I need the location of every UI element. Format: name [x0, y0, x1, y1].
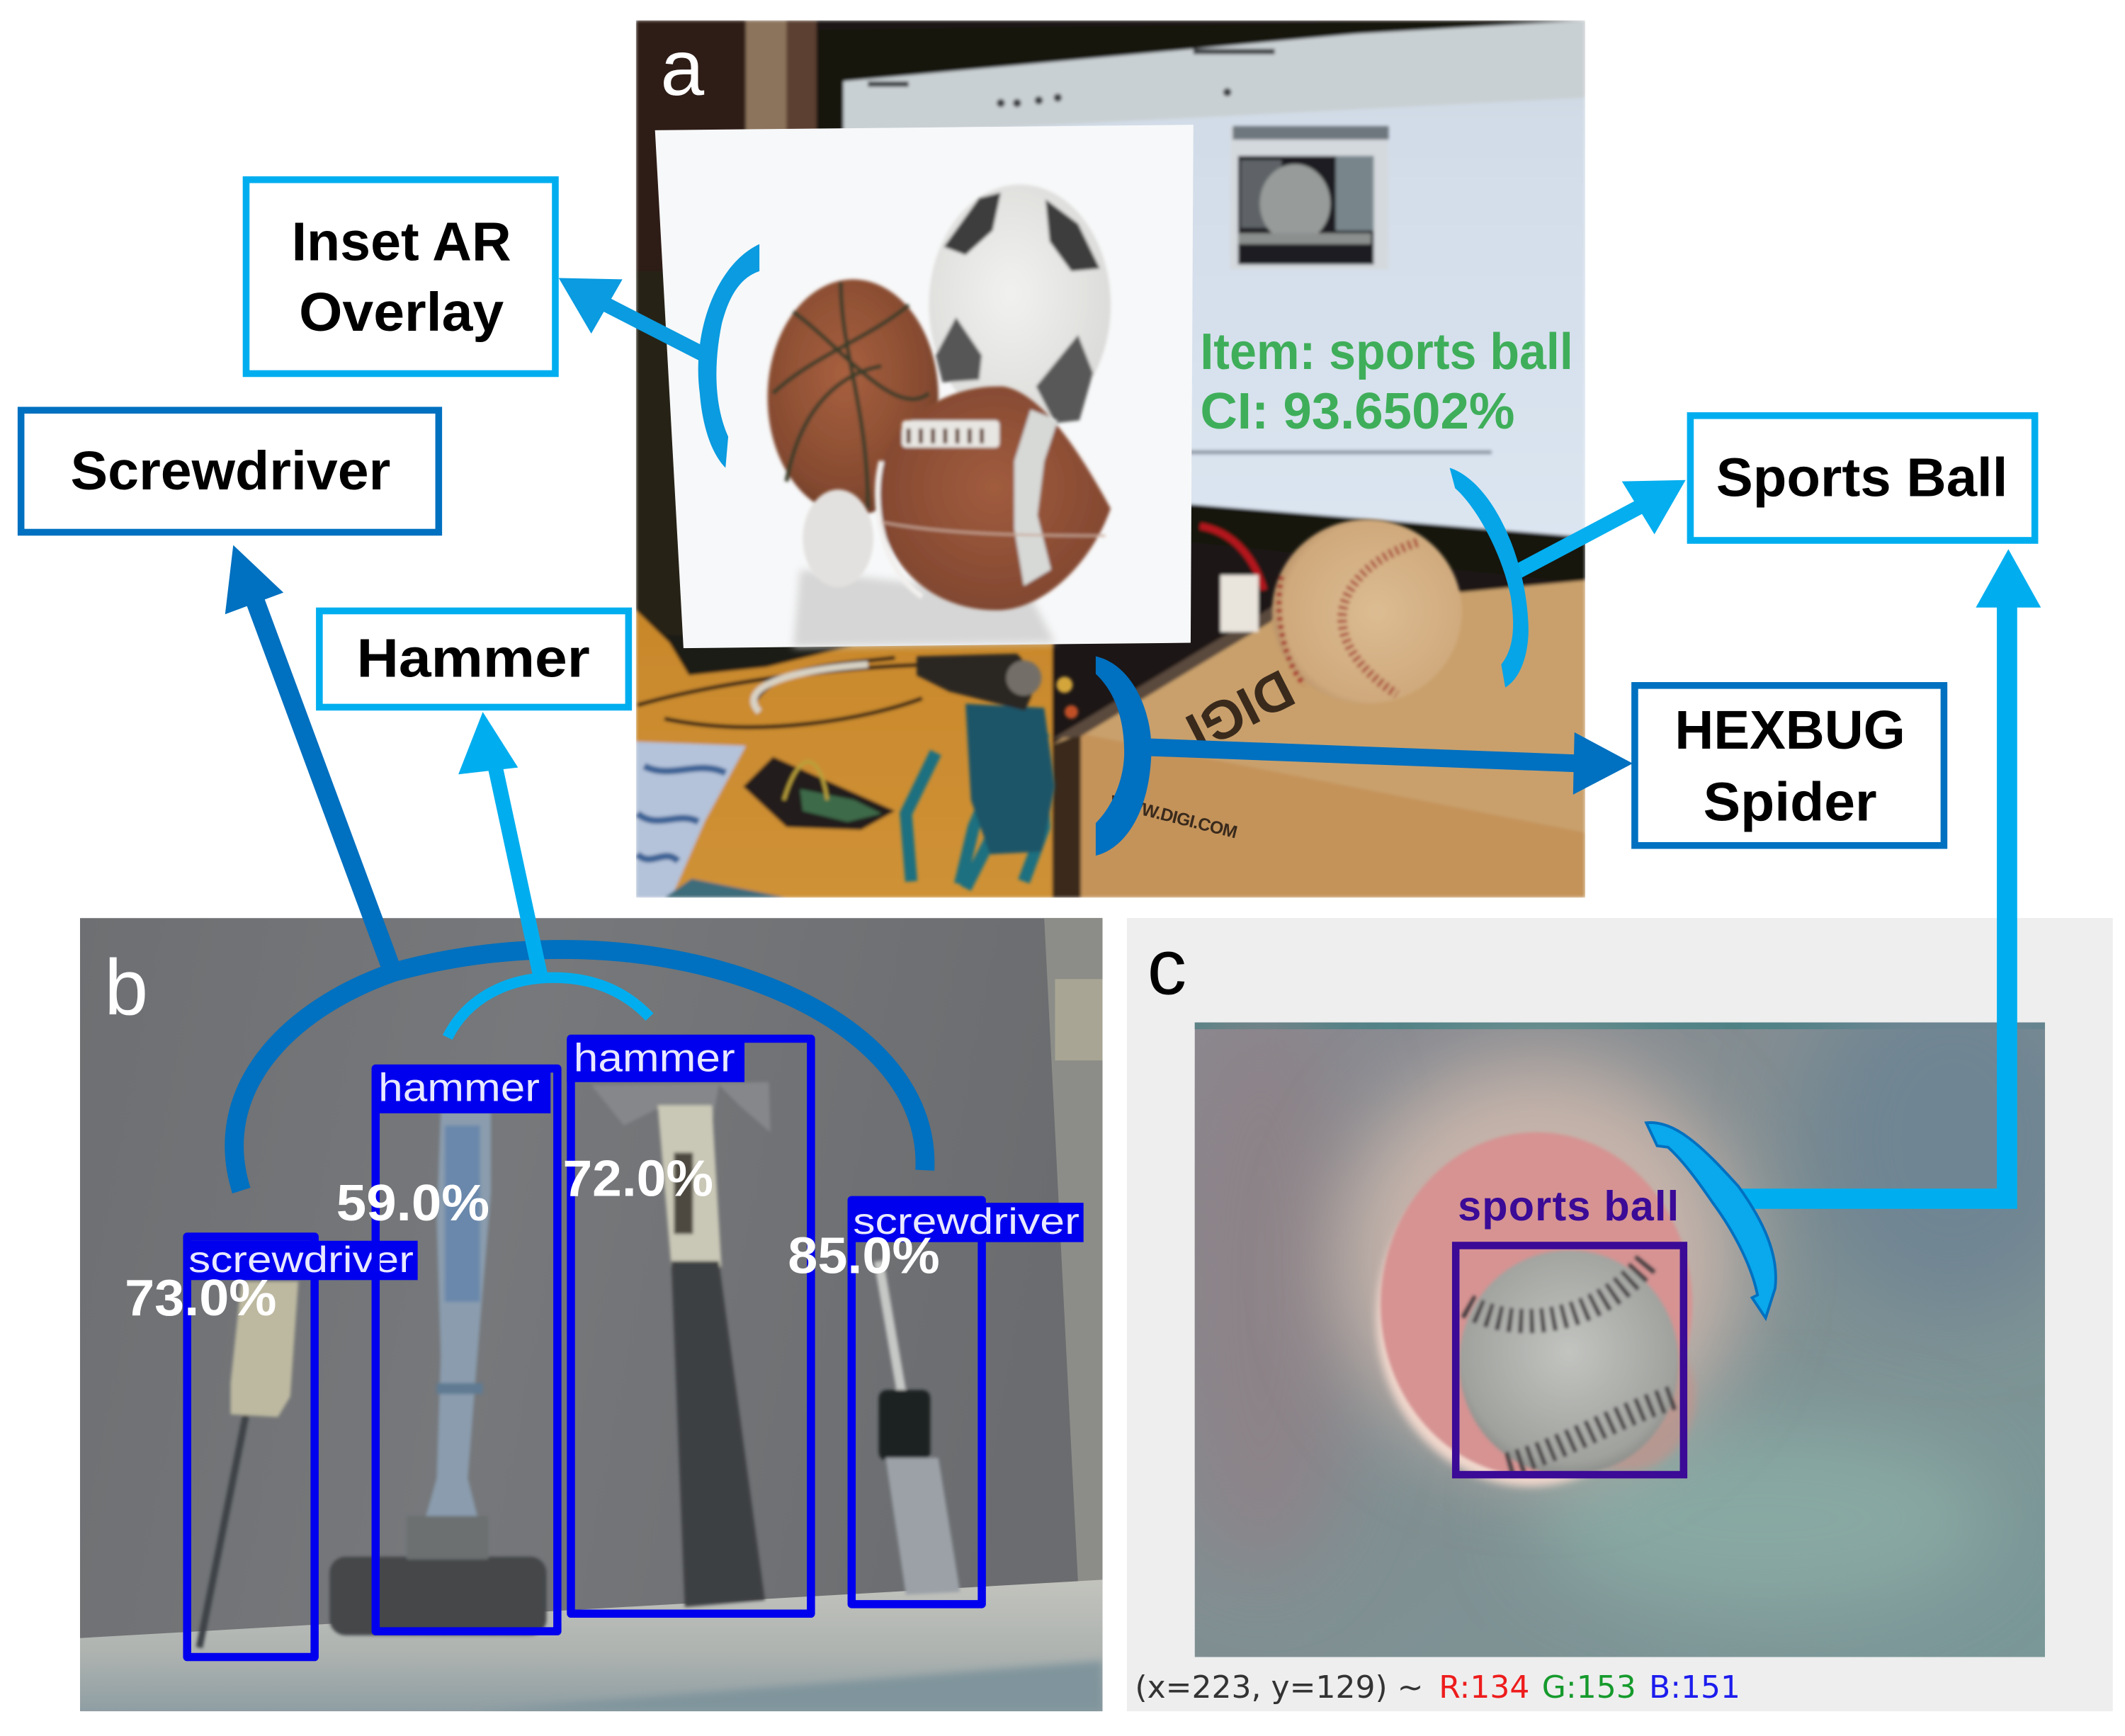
bracket: hexbug [1096, 657, 1151, 856]
claw hammer [591, 1082, 770, 1607]
poster floor shadow [793, 569, 1055, 647]
panel letter c: c [1148, 922, 1186, 1011]
label: Sports Ball [1690, 416, 2035, 540]
detection box: screwdriver 2: screwdriver [853, 1201, 1080, 1242]
panel letter b: b [104, 943, 148, 1031]
label: Screwdriver: Screwdriver [71, 441, 390, 501]
bracket: inset overlay [698, 244, 759, 468]
pixel readout: G:153 [1542, 1669, 1636, 1706]
confidence labels: 72.0% [563, 1150, 713, 1208]
arrow: screwdrivers [225, 545, 925, 1191]
box lettering [1112, 670, 1295, 839]
label: Inset AR Overlay: Inset AR [292, 212, 511, 273]
grey baseball [1459, 1250, 1679, 1475]
confidence labels: 85.0% [788, 1227, 940, 1285]
detection box sports ball: sports ball [1458, 1182, 1679, 1230]
detection box sports ball [1456, 1182, 1684, 1475]
detection box: screwdriver 1 [184, 1237, 418, 1657]
wall and floor [80, 918, 1102, 1711]
inset AR overlay poster [655, 125, 1194, 648]
panel c: sports ball detection window [1127, 918, 2113, 1711]
confidence labels [125, 1150, 940, 1327]
basketball [768, 279, 939, 516]
arc: hammer group [448, 977, 650, 1038]
arrow: sports ball photo [1450, 468, 1686, 688]
hexbug spider robot [906, 654, 1078, 888]
pixel readout: B:151 [1649, 1669, 1740, 1706]
detection box: screwdriver 2 [849, 1200, 1084, 1604]
label: Inset AR Overlay: Overlay [299, 283, 504, 343]
box lettering: WWW.DIGI.COM [1109, 792, 1240, 842]
arrow: hexbug spider [1096, 657, 1633, 856]
pixel readout: R:134 [1439, 1669, 1529, 1706]
photo backdrop: monitor and desk [636, 21, 1585, 897]
bracket: baseball [1450, 468, 1529, 688]
detection box: hammer 2: hammer [574, 1036, 735, 1079]
screen detection text: Item: sports ball [1200, 323, 1573, 380]
detection box: hammer 1: hammer [378, 1066, 540, 1110]
label: Hammer [319, 611, 628, 707]
screen inset thumbnail [1230, 126, 1388, 270]
large baseball [1272, 519, 1462, 704]
small baseball [803, 489, 873, 587]
label: HEXBUG Spider: Spider [1704, 772, 1877, 832]
label: HEXBUG Spider: HEXBUG [1674, 700, 1905, 761]
arrow: hammers [448, 712, 650, 1038]
camera image [1166, 963, 2102, 1657]
arrow: inset AR overlay [559, 244, 759, 468]
label: Inset AR Overlay [246, 180, 555, 373]
detection box: hammer 1 [374, 1066, 557, 1631]
confidence labels: 73.0% [125, 1269, 277, 1327]
screen detection text: CI: 93.6502% [1200, 382, 1514, 440]
panel a: AR photo [636, 21, 1585, 897]
detection box: hammer 2 [567, 1036, 811, 1613]
label: Hammer: Hammer [357, 628, 590, 688]
arrow: baseball detection to sports ball [1646, 549, 2041, 1318]
mallet hammer [329, 1112, 547, 1635]
arc: screwdriver group [234, 950, 925, 1191]
panel letter a: a [660, 23, 704, 112]
detection box: screwdriver 1: screwdriver [188, 1239, 414, 1280]
screen detection text [1202, 331, 1570, 429]
window background [1127, 918, 2113, 1711]
screwdriver tool right [879, 1261, 960, 1594]
football [878, 386, 1111, 611]
bracket: detected ball [1646, 1123, 1776, 1318]
label: HEXBUG Spider [1635, 686, 1944, 846]
label: Screwdriver [21, 410, 438, 532]
pixel readout: (x=223, y=129) ~ [1135, 1669, 1424, 1706]
screwdriver tool left [199, 1281, 298, 1647]
confidence labels: 59.0% [336, 1174, 489, 1232]
soccer ball [929, 184, 1111, 426]
box lettering: DIGI [1177, 658, 1303, 762]
label: Sports Ball: Sports Ball [1716, 448, 2007, 509]
panel b: tool detection photo [80, 918, 1102, 1711]
